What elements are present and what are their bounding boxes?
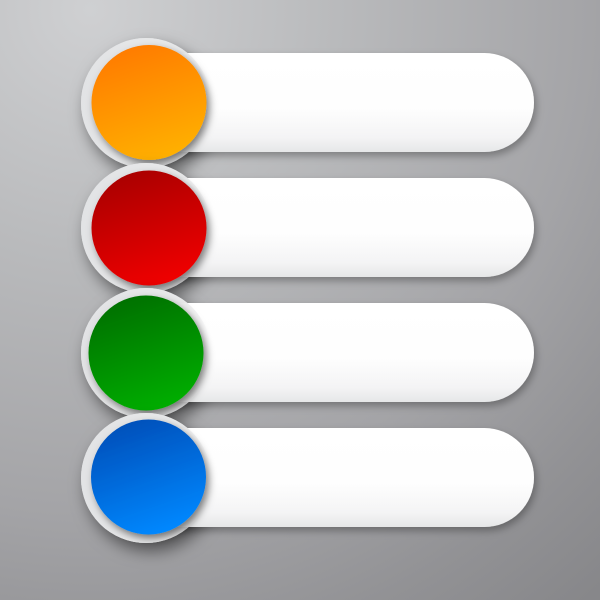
- disc 4: [91, 420, 206, 534]
- ring 4: [81, 413, 211, 543]
- disc 1: [92, 45, 206, 160]
- row 4: blue banner: [81, 413, 534, 543]
- disc 2: [92, 170, 206, 286]
- pill 1: [120, 53, 534, 152]
- pill 2: [120, 178, 534, 277]
- disc 3: [88, 296, 204, 410]
- ring 1: [81, 38, 211, 168]
- row 1: orange banner: [81, 38, 534, 168]
- ring 3: [81, 288, 211, 418]
- row 2: red banner: [81, 163, 534, 293]
- pill 3: [120, 303, 534, 402]
- ring 4 shadow: [81, 413, 211, 543]
- ring 2 shadow: [81, 163, 211, 293]
- ring 3 shadow: [81, 288, 211, 418]
- row 3: green banner: [81, 288, 534, 418]
- ring 1 shadow: [81, 38, 211, 168]
- pill 4: [120, 428, 534, 527]
- ring 2: [81, 163, 211, 293]
